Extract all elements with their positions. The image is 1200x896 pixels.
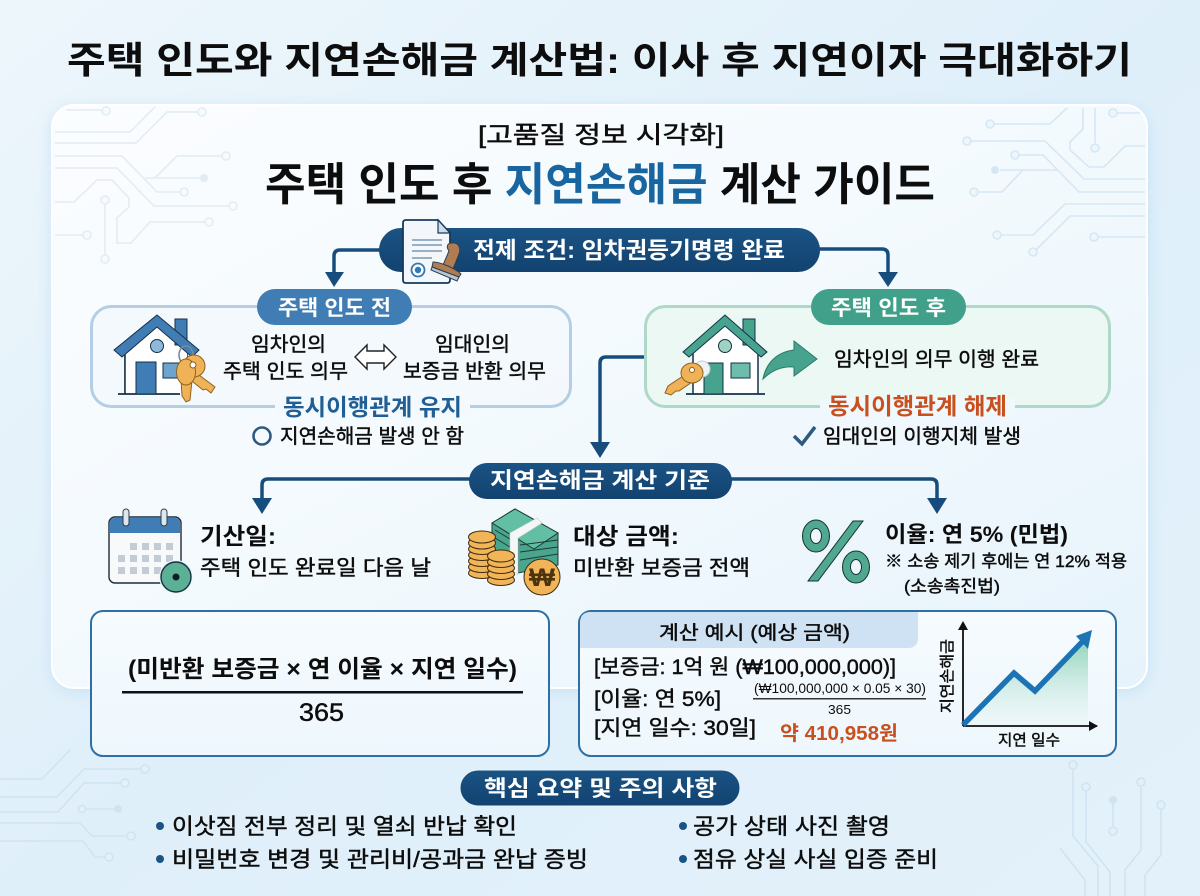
line chart: 지연손해금 (939, 639, 956, 713)
example fraction: 365 (828, 702, 851, 717)
icon: percent (802, 520, 870, 583)
item: interest rate (802, 520, 1127, 596)
example inputs: [보증금: 1억 원 (₩100,000,000)] (594, 656, 896, 679)
arrow: criteria to left (252, 479, 470, 514)
example heading: 계산 예시 (예상 금액) (659, 622, 850, 644)
status: maintained: 동시이행관계 유지 (283, 394, 462, 420)
rate text: ※ 소송 제기 후에는 연 12% 적용 (885, 552, 1127, 571)
tenant duty: 임차인의 (251, 333, 326, 356)
tenant duty: 주택 인도 의무 (223, 360, 348, 383)
panel: formula (91, 611, 549, 756)
start date text: 주택 인도 완료일 다음 날 (200, 557, 431, 580)
tenant duty (223, 333, 348, 383)
bullet: photos: 공가 상태 사진 촬영 (693, 814, 890, 839)
after pill: 주택 인도 후 (831, 297, 946, 320)
item: start date (109, 509, 431, 594)
amount text: 대상 금액: (573, 523, 679, 549)
start date text (200, 523, 431, 580)
criteria banner: 지연손해금 계산 기준 (490, 468, 710, 493)
panel: calculation example (579, 611, 1116, 756)
panel: formula: (미반환 보증금 × 연 이율 × 지연 일수) (128, 656, 517, 683)
subtitle tag: [고품질 정보 시각화] (478, 122, 724, 149)
start date text: 기산일: (200, 523, 276, 549)
panel: before handover (92, 289, 570, 448)
example heading (580, 612, 918, 648)
amount text (573, 523, 750, 580)
item: target amount (468, 509, 750, 595)
landlord duty: 보증금 반환 의무 (403, 360, 546, 383)
icon: cash and coins (468, 509, 560, 595)
line chart (939, 621, 1098, 749)
icon: calendar (109, 509, 193, 594)
rate text: (소송촉진법) (904, 577, 1000, 596)
main heading: 주택 인도 후 지연손해금 계산 가이드 (265, 159, 935, 210)
before pill: 주택 인도 전 (278, 297, 391, 320)
status: released: 동시이행관계 해제 (828, 393, 1007, 419)
prerequisite banner (379, 220, 820, 283)
criteria banner (469, 463, 732, 499)
panel: formula: 365 (299, 699, 344, 727)
icon: double arrow (355, 345, 396, 369)
example inputs: [이율: 연 5%] (594, 688, 721, 711)
banner text: 전제 조건: 임차권등기명령 완료 (473, 237, 785, 263)
icon: house with key and arrow (665, 315, 817, 395)
example inputs (594, 656, 896, 740)
summary banner (460, 770, 740, 806)
no delay damages: 지연손해금 발생 안 함 (280, 425, 464, 448)
bullet: password and bills: 비밀번호 변경 및 관리비/공과금 완납 증빙 (172, 847, 588, 872)
title: 주택 인도와 지연손해금 계산법: 이사 후 지연이자 극대화하기 (67, 40, 1132, 81)
bullet: tidy and keys: 이삿짐 전부 정리 및 열쇠 반납 확인 (172, 814, 517, 839)
after pill (811, 289, 966, 325)
arrow: prerequisite to before (325, 250, 380, 287)
amount text: 미반환 보증금 전액 (573, 557, 750, 580)
summary list (156, 814, 938, 872)
landlord default: 임대인의 이행지체 발생 (823, 425, 1021, 448)
landlord duty: 임대인의 (435, 333, 510, 356)
example fraction: (₩100,000,000 × 0.05 × 30) (754, 680, 926, 696)
panel: after handover (646, 289, 1110, 448)
card shadow (50, 107, 1150, 693)
bullet: proof: 점유 상실 사실 입증 준비 (693, 847, 938, 872)
landlord duty (403, 333, 546, 383)
tenant duty done: 임차인의 의무 이행 완료 (834, 348, 1039, 371)
arrow: after panel to criteria (590, 357, 644, 458)
example inputs: [지연 일수: 30일] (594, 717, 756, 740)
icon: cash and coins: ₩ (529, 564, 555, 592)
summary banner: 핵심 요약 및 주의 사항 (484, 776, 717, 801)
icon: document with stamp (403, 220, 461, 283)
example fraction (753, 680, 926, 717)
icon: house and keys (114, 315, 215, 402)
arrow: prerequisite to after (818, 249, 898, 287)
arrow: criteria to right (730, 479, 947, 514)
before pill (257, 289, 412, 325)
line chart: 지연 일수 (998, 732, 1060, 749)
main card (52, 105, 1147, 688)
example result: 약 410,958원 (780, 722, 898, 745)
rate text (885, 522, 1127, 596)
rate text: 이율: 연 5% (민법) (885, 522, 1068, 547)
